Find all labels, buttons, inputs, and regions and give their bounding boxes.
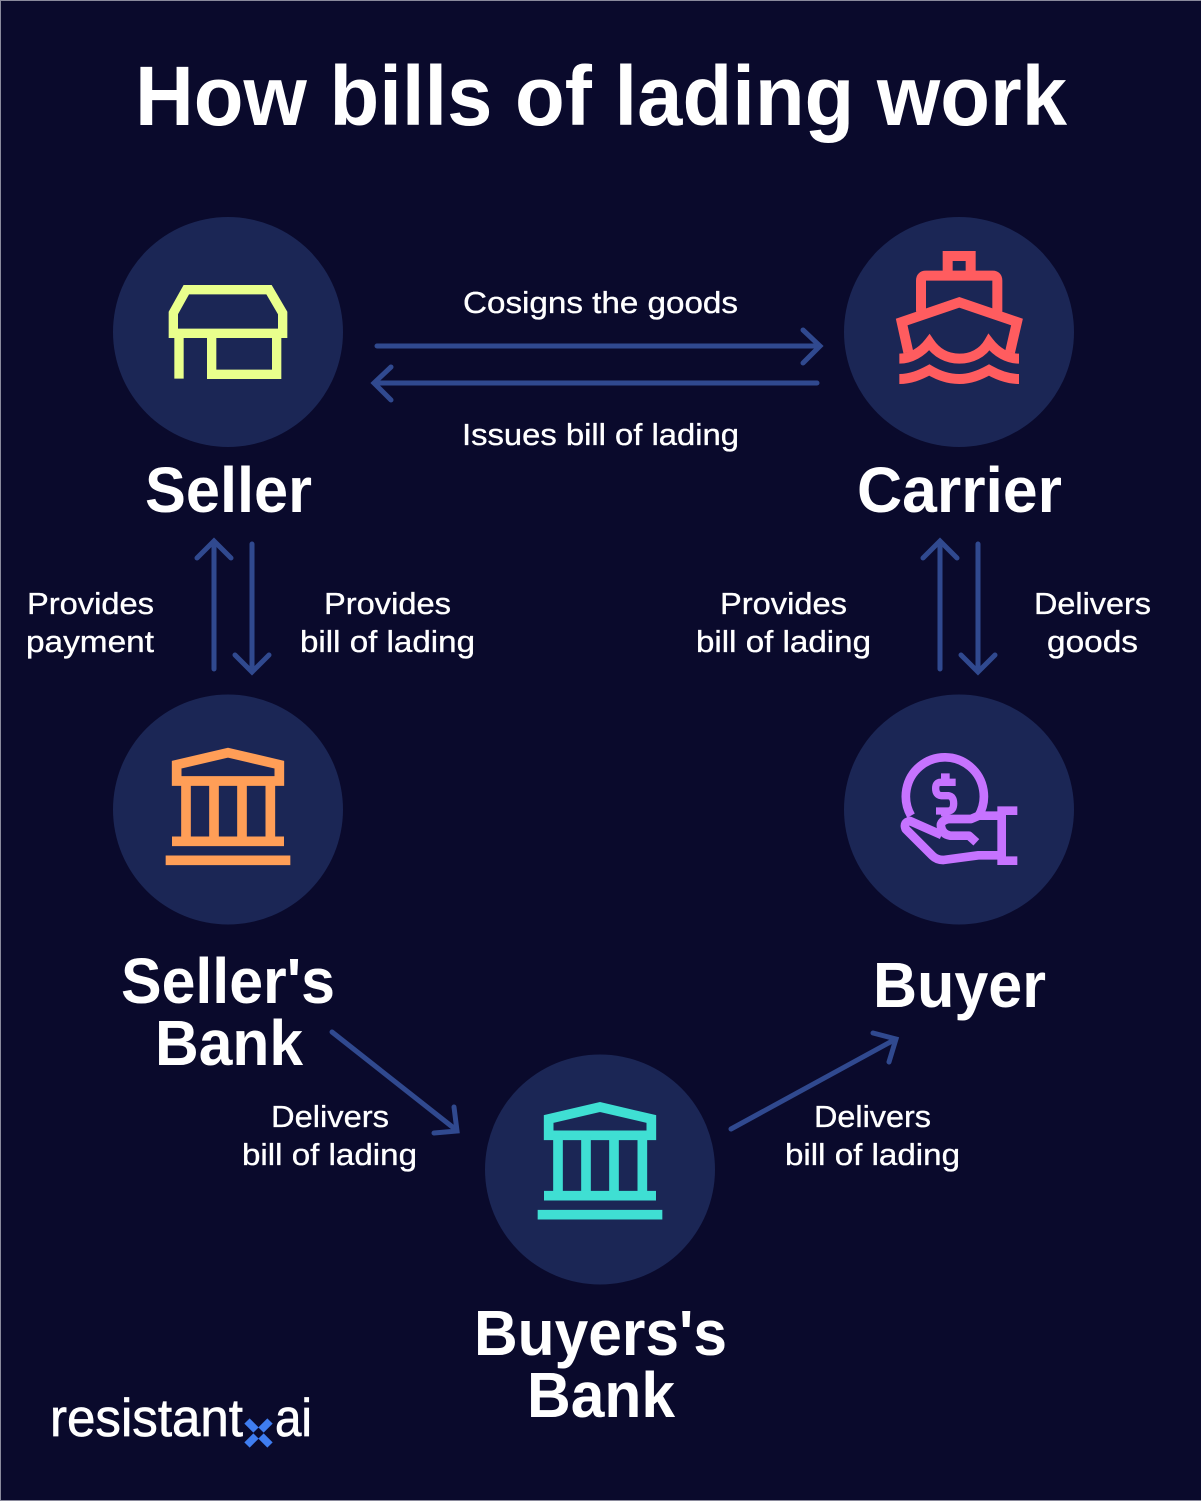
label: Provides bill of lading (right): Provides <box>720 586 847 621</box>
arrow: carrier to seller <box>374 367 817 400</box>
arrow: seller's bank to buyer's bank <box>332 1032 457 1133</box>
label: Issues bill of lading: Issues bill of lading <box>462 417 739 452</box>
node: Seller <box>113 217 343 526</box>
node: Carrier <box>844 217 1074 526</box>
label: Provides bill of lading (left): bill of lading <box>300 624 475 659</box>
arrow: buyer's bank to buyer <box>731 1033 896 1129</box>
circle: Carrier <box>844 217 1074 447</box>
icon: ship <box>899 256 1019 379</box>
node: Buyer <box>844 694 1074 1021</box>
label: Provides payment: Provides <box>27 586 154 621</box>
arrow: seller to seller's bank <box>235 544 269 672</box>
circle: Buyer <box>844 694 1074 924</box>
heading: Buyer: Buyer <box>873 949 1046 1021</box>
icon: orange bank <box>166 753 290 860</box>
node: Buyers's Bank <box>474 1054 727 1431</box>
heading: Seller's Bank: Bank <box>155 1007 303 1079</box>
arrow: carrier to buyer <box>961 544 995 672</box>
icon: storefront <box>173 290 283 379</box>
title: How bills of lading work <box>135 49 1067 143</box>
icon: coin in hand <box>905 757 1017 861</box>
label: Delivers bill of lading (right): Delivers <box>814 1099 931 1134</box>
logo: resistant ai: ai <box>275 1389 312 1448</box>
label: Provides payment <box>26 586 154 659</box>
label: Provides bill of lading (left): Provides <box>324 586 451 621</box>
circle: Seller <box>113 217 343 447</box>
label: Provides payment: payment <box>26 624 154 659</box>
heading: Buyers's Bank <box>474 1297 727 1431</box>
arrow: seller's bank to seller <box>197 541 231 669</box>
node: Seller's Bank <box>113 694 343 1079</box>
label: Delivers bill of lading (right) <box>785 1099 960 1172</box>
label: Delivers goods: Delivers <box>1034 586 1151 621</box>
circle: Buyers's Bank <box>485 1054 715 1284</box>
label: Provides bill of lading (left) <box>300 586 475 659</box>
arrow: buyer to carrier <box>923 541 957 669</box>
label: Cosigns the goods: Cosigns the goods <box>463 285 738 320</box>
label: Provides bill of lading (right): bill of lading <box>696 624 871 659</box>
heading: Buyers's Bank: Bank <box>527 1359 675 1431</box>
label: Delivers bill of lading (left): Delivers <box>271 1099 389 1134</box>
label: Delivers bill of lading (left) <box>242 1099 417 1172</box>
arrow: seller to carrier <box>377 330 820 363</box>
label: Delivers bill of lading (left): bill of lading <box>242 1137 417 1172</box>
label: Delivers goods <box>1034 586 1151 659</box>
heading: Buyers's Bank: Buyers's <box>474 1297 727 1369</box>
circle: Seller's Bank <box>113 694 343 924</box>
heading: Seller: Seller <box>145 454 312 526</box>
label: Delivers goods: goods <box>1047 624 1138 659</box>
label: Delivers bill of lading (right): bill of lading <box>785 1137 960 1172</box>
heading: Carrier: Carrier <box>857 454 1062 526</box>
logo: resistant ai: resistant <box>50 1389 243 1448</box>
label: Provides bill of lading (right) <box>696 586 871 659</box>
heading: Seller's Bank <box>121 945 335 1079</box>
icon: teal bank <box>538 1107 662 1215</box>
icon: logo x mark <box>247 1421 270 1445</box>
heading: Seller's Bank: Seller's <box>121 945 335 1017</box>
